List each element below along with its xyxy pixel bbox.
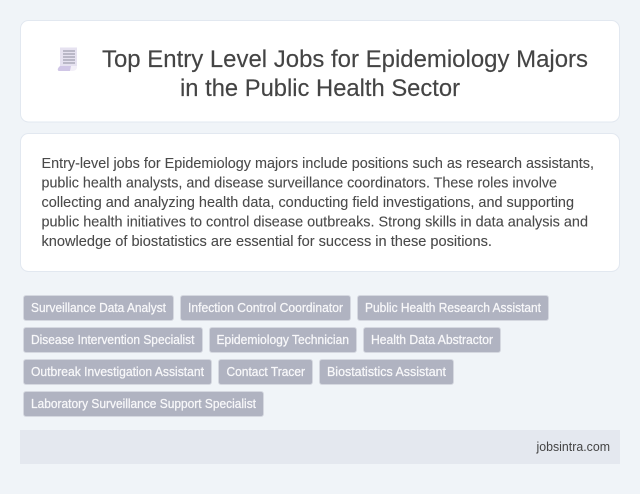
tag: Epidemiology Technician [210,328,356,352]
job tags [24,296,548,416]
title [102,46,588,102]
tag: Health Data Abstractor: Health Data Abstractor [371,333,493,347]
description text: public health initiatives to control disease outbreaks. Strong skills in data analysis and [42,214,588,230]
tag: Contact Tracer [218,360,312,384]
tag: Surveillance Data Analyst [24,296,174,320]
description text: Entry-level jobs for Epidemiology majors include positions such as research assistants, [42,156,594,172]
tag: Disease Intervention Specialist [24,328,202,352]
title: in the Public Health Sector [180,75,460,102]
tag: Laboratory Surveillance Support Specialist [24,392,264,416]
description text: knowledge of biostatistics are essential for success in these positions. [42,234,492,250]
tag: Biostatistics Assistant [320,360,454,384]
tag: Epidemiology Technician: Epidemiology Technician [216,333,349,347]
title: Top Entry Level Jobs for Epidemiology Majors [102,46,588,73]
tag: Public Health Research Assistant: Public Health Research Assistant [365,301,541,315]
panel: title card [20,20,620,122]
footer [20,430,620,464]
tag: Public Health Research Assistant [358,296,548,320]
panel: description card [20,134,620,272]
tag: Health Data Abstractor [364,328,500,352]
description text [42,156,594,250]
tag: Outbreak Investigation Assistant: Outbreak Investigation Assistant [31,365,204,379]
icon: document scroll [58,48,77,71]
tag: Infection Control Coordinator: Infection Control Coordinator [188,301,343,315]
tag: Contact Tracer: Contact Tracer [226,365,305,379]
footer: jobsintra.com [536,439,610,454]
tag: Disease Intervention Specialist: Disease Intervention Specialist [31,333,195,347]
tag: Laboratory Surveillance Support Specialist: Laboratory Surveillance Support Specialist [31,397,256,411]
tag: Surveillance Data Analyst: Surveillance Data Analyst [31,301,166,315]
tag: Outbreak Investigation Assistant [24,360,212,384]
description text: collecting and analyzing health data, conducting field investigations, and supporting [42,195,574,211]
description text: public health analysts, and disease surveillance coordinators. These roles involve [42,176,557,192]
tag: Infection Control Coordinator [180,296,350,320]
tag: Biostatistics Assistant: Biostatistics Assistant [327,365,446,379]
